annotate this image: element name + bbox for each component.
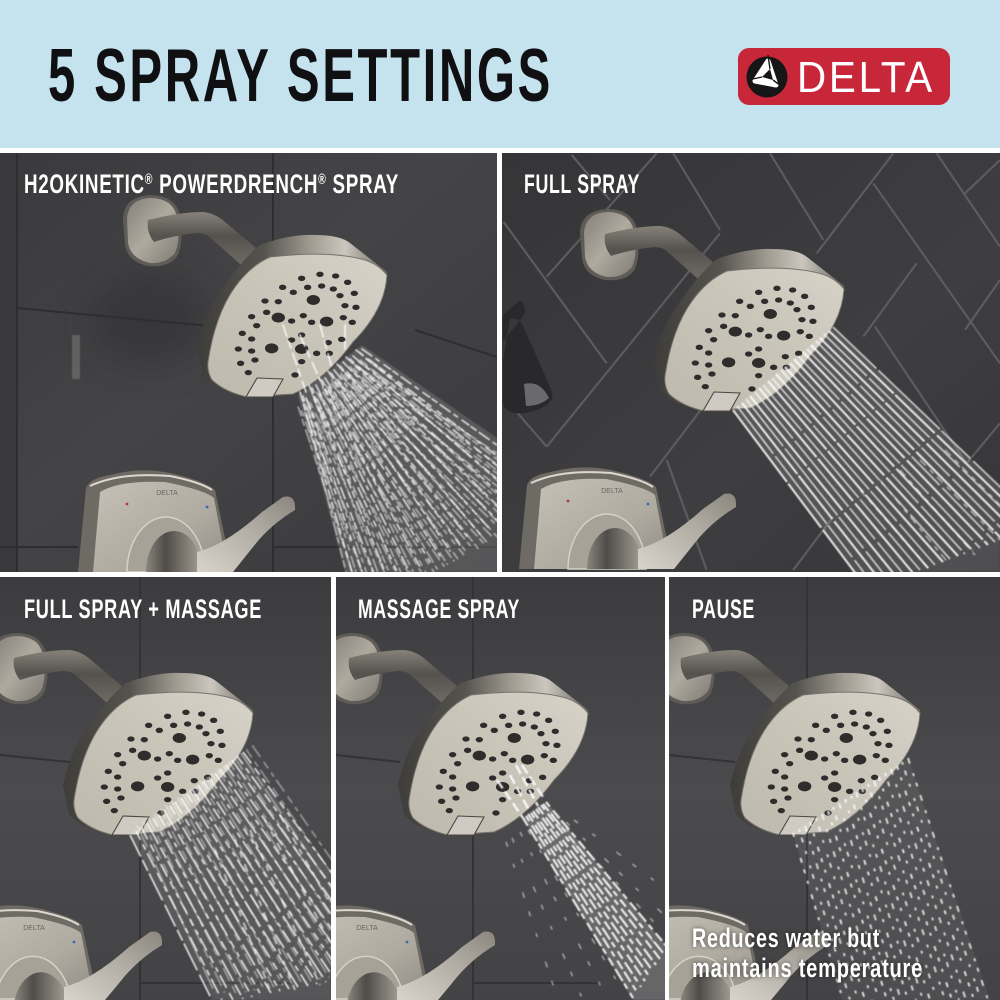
callout [692,923,923,983]
faucet brand mark: DELTA [156,490,178,497]
label: POWERDRENCH [153,169,318,199]
title: 5 SPRAY SETTINGS [48,33,553,117]
header band [0,0,1000,148]
panel: massage spray [336,577,665,1000]
icon: faucet handle [336,905,496,1000]
icon: faucet handle [0,905,162,1000]
faucet brand mark: DELTA [356,925,378,932]
icon: shower head [123,195,387,398]
wall tiles [669,577,1000,1000]
wall tiles [0,577,331,1000]
icon: shower head [0,633,253,836]
water spray [733,327,1000,590]
icon: shower head [324,633,588,836]
label: SPRAY [327,169,399,199]
label: H2OKINETIC [24,169,198,199]
icon: faucet handle [519,467,736,569]
label: MASSAGE SPRAY [358,594,520,624]
wall tiles [0,153,497,572]
panel: H2Okinetic PowerDrench spray [0,153,497,572]
callout: maintains temperature [692,953,923,983]
wall tiles [336,577,665,1000]
label: FULL SPRAY + MASSAGE [24,594,262,624]
water spray [793,758,990,1000]
faucet brand mark: DELTA [23,925,45,932]
icon: faucet handle [669,905,828,1000]
label: FULL SPRAY [524,169,640,199]
icon: shower head [656,633,920,836]
panel: pause [669,577,1000,1000]
water spray [128,744,331,1000]
Delta logo [738,48,950,105]
icon: faucet handle [78,470,295,572]
faucet brand mark: DELTA [601,488,623,495]
Delta logo: DELTA [797,53,935,102]
herringbone wall tiles [502,153,1000,572]
water spray [497,765,680,1000]
panel: full spray [502,153,1000,590]
panel: full spray + massage [0,577,331,1000]
water spray [282,324,497,572]
icon: tub spout on back wall [503,300,553,413]
callout: Reduces water but [692,923,880,953]
label: ® [145,171,153,188]
label: ® [318,171,327,188]
icon: shower head [580,209,844,412]
label: PAUSE [692,594,755,624]
